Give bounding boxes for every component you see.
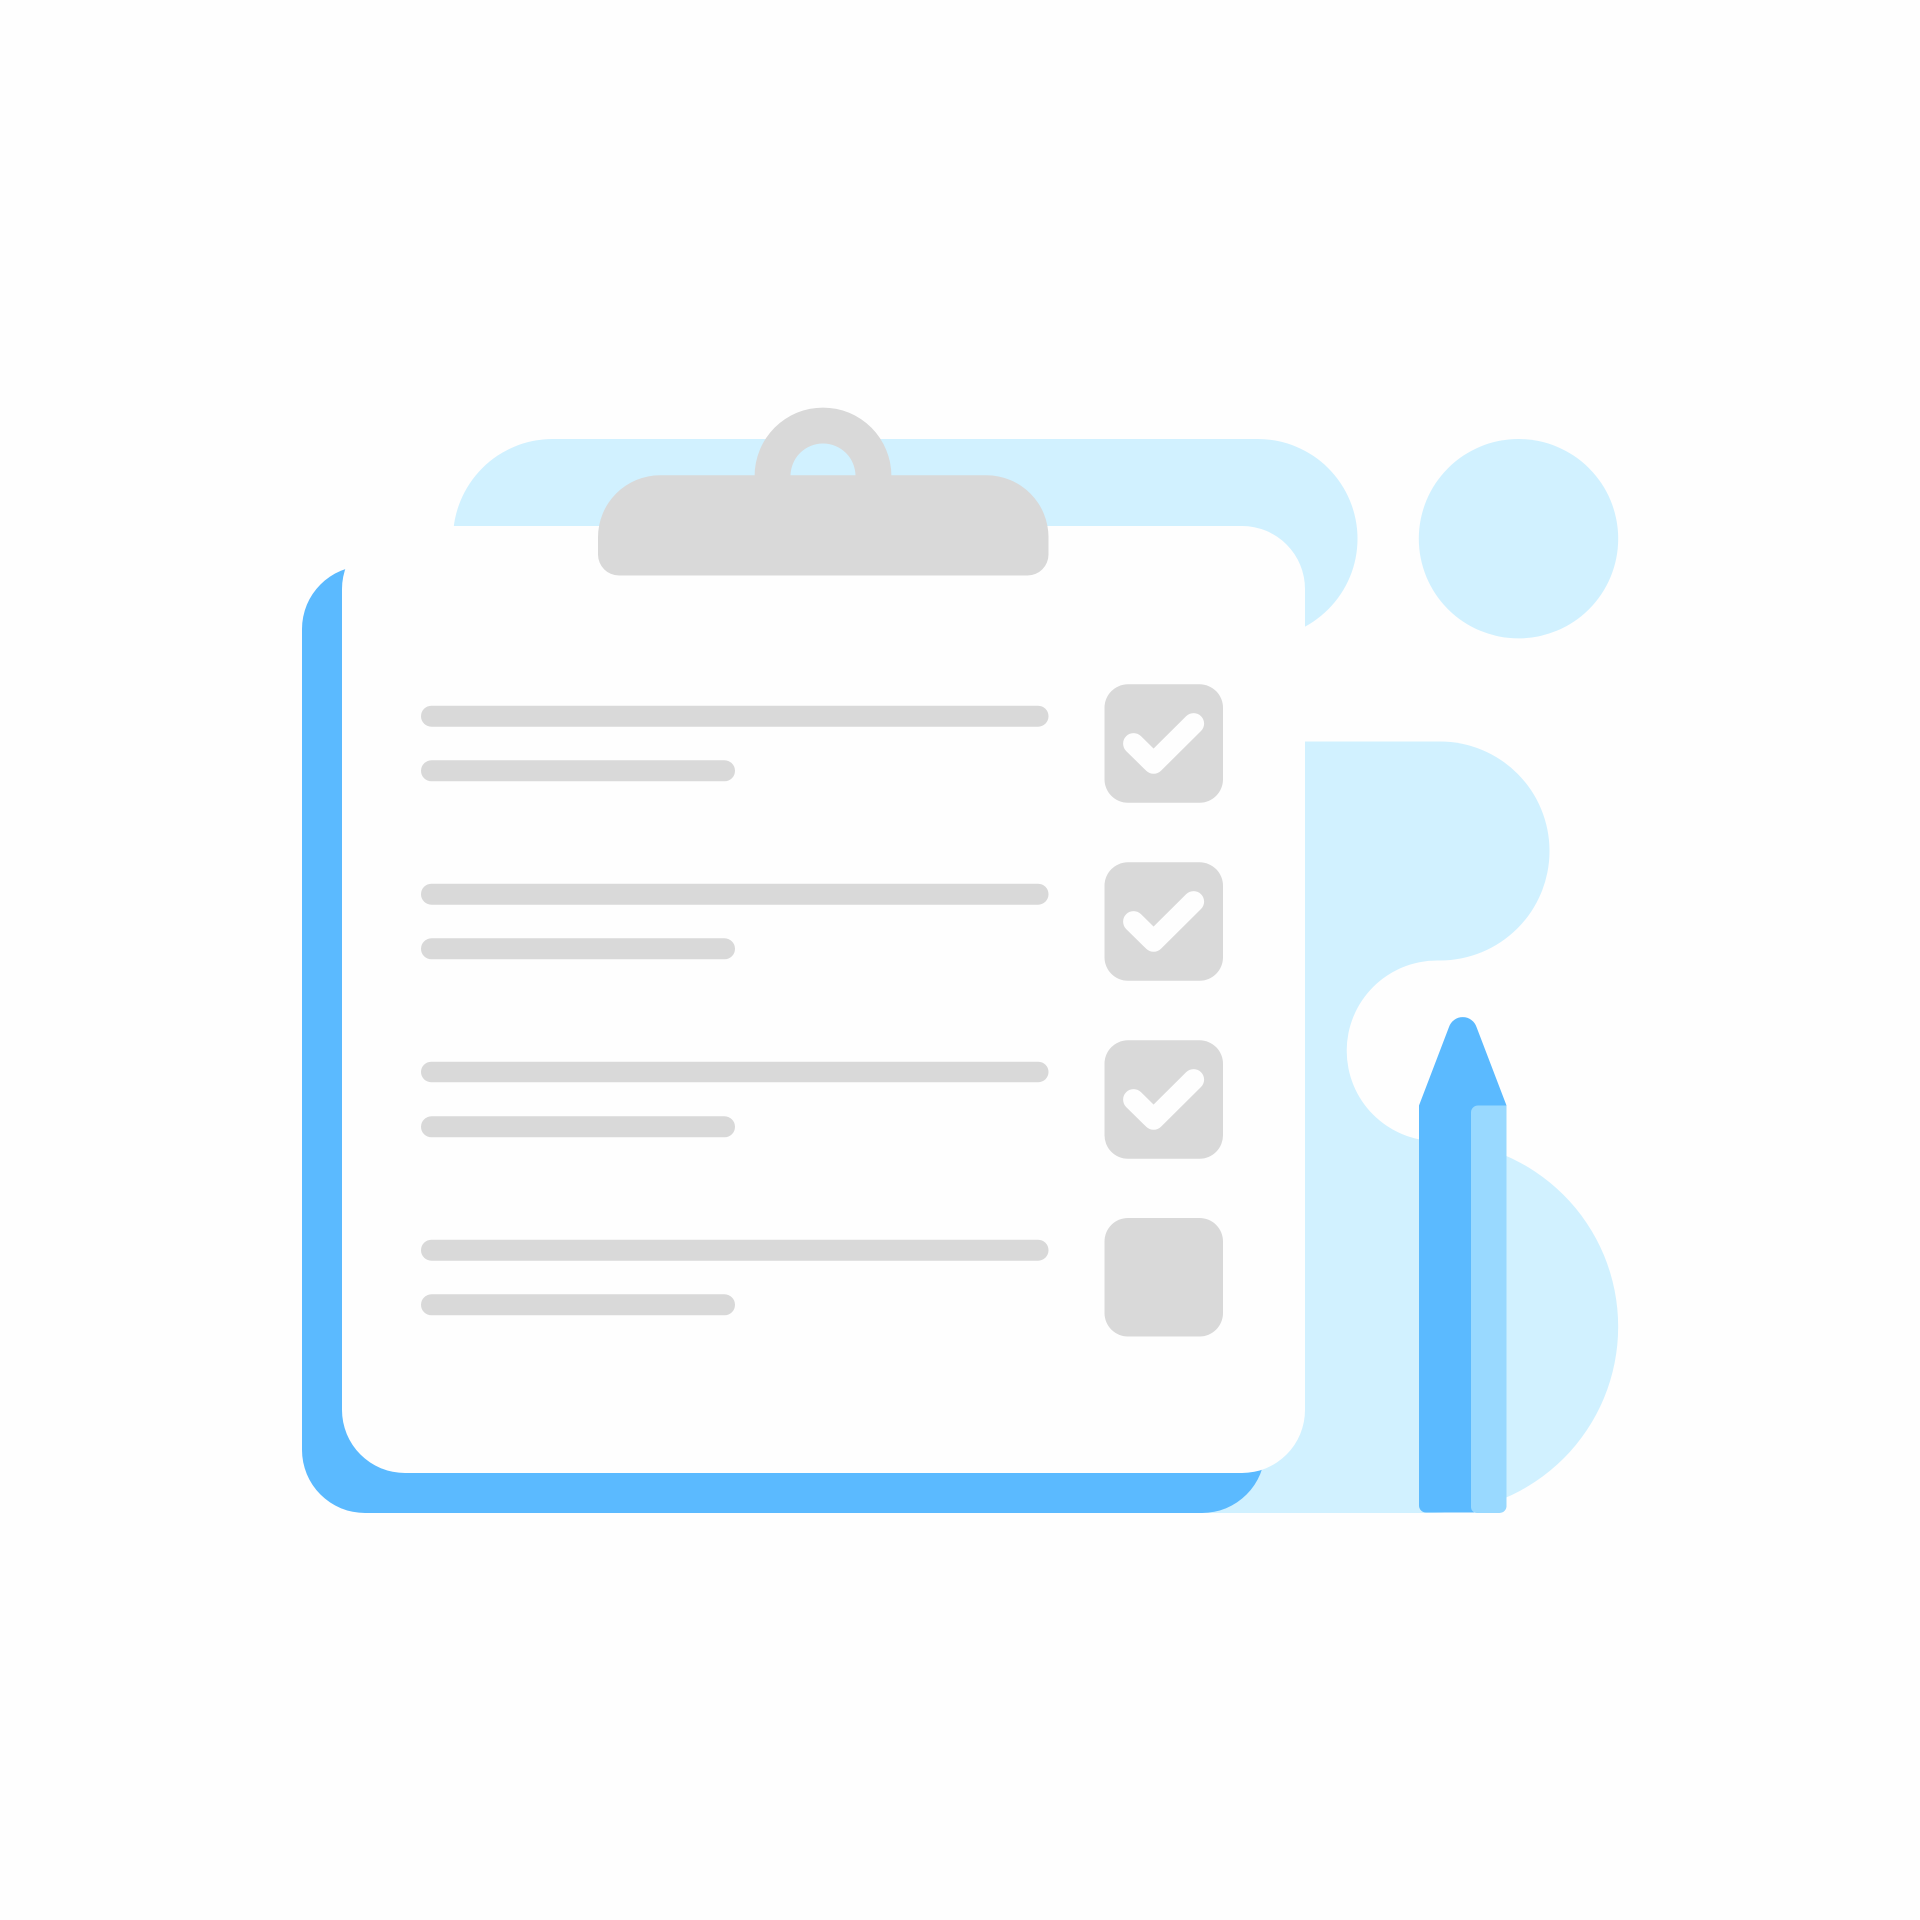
clip ring: [755, 408, 891, 476]
background: light blue middle shape: [1304, 742, 1549, 960]
checklist row 2 text lines: [421, 884, 1048, 959]
checkbox 4 empty: [1104, 1218, 1223, 1336]
pencil: [1419, 1017, 1507, 1513]
checkbox 2 checked: [1104, 862, 1223, 981]
background: light blue lower curved shape: [1200, 960, 1618, 1513]
pencil body light side: [1471, 1106, 1507, 1513]
pencil tip: [1419, 1017, 1506, 1106]
checklist row 3 text lines: [421, 1062, 1048, 1137]
clipboard paper panel: [342, 408, 1305, 1473]
checkbox 1 checked: [1104, 684, 1223, 803]
background: light blue top pill: [453, 439, 1358, 638]
checklist row 4 text lines: [421, 1240, 1048, 1315]
clip body: [598, 475, 1048, 576]
checkbox 3 checked: [1104, 1040, 1223, 1159]
clipboard back board: [302, 566, 1265, 1513]
pencil body dark side: [1419, 1106, 1480, 1512]
checklist row 1 text lines: [421, 706, 1048, 781]
background: light blue circle: [1419, 439, 1618, 638]
